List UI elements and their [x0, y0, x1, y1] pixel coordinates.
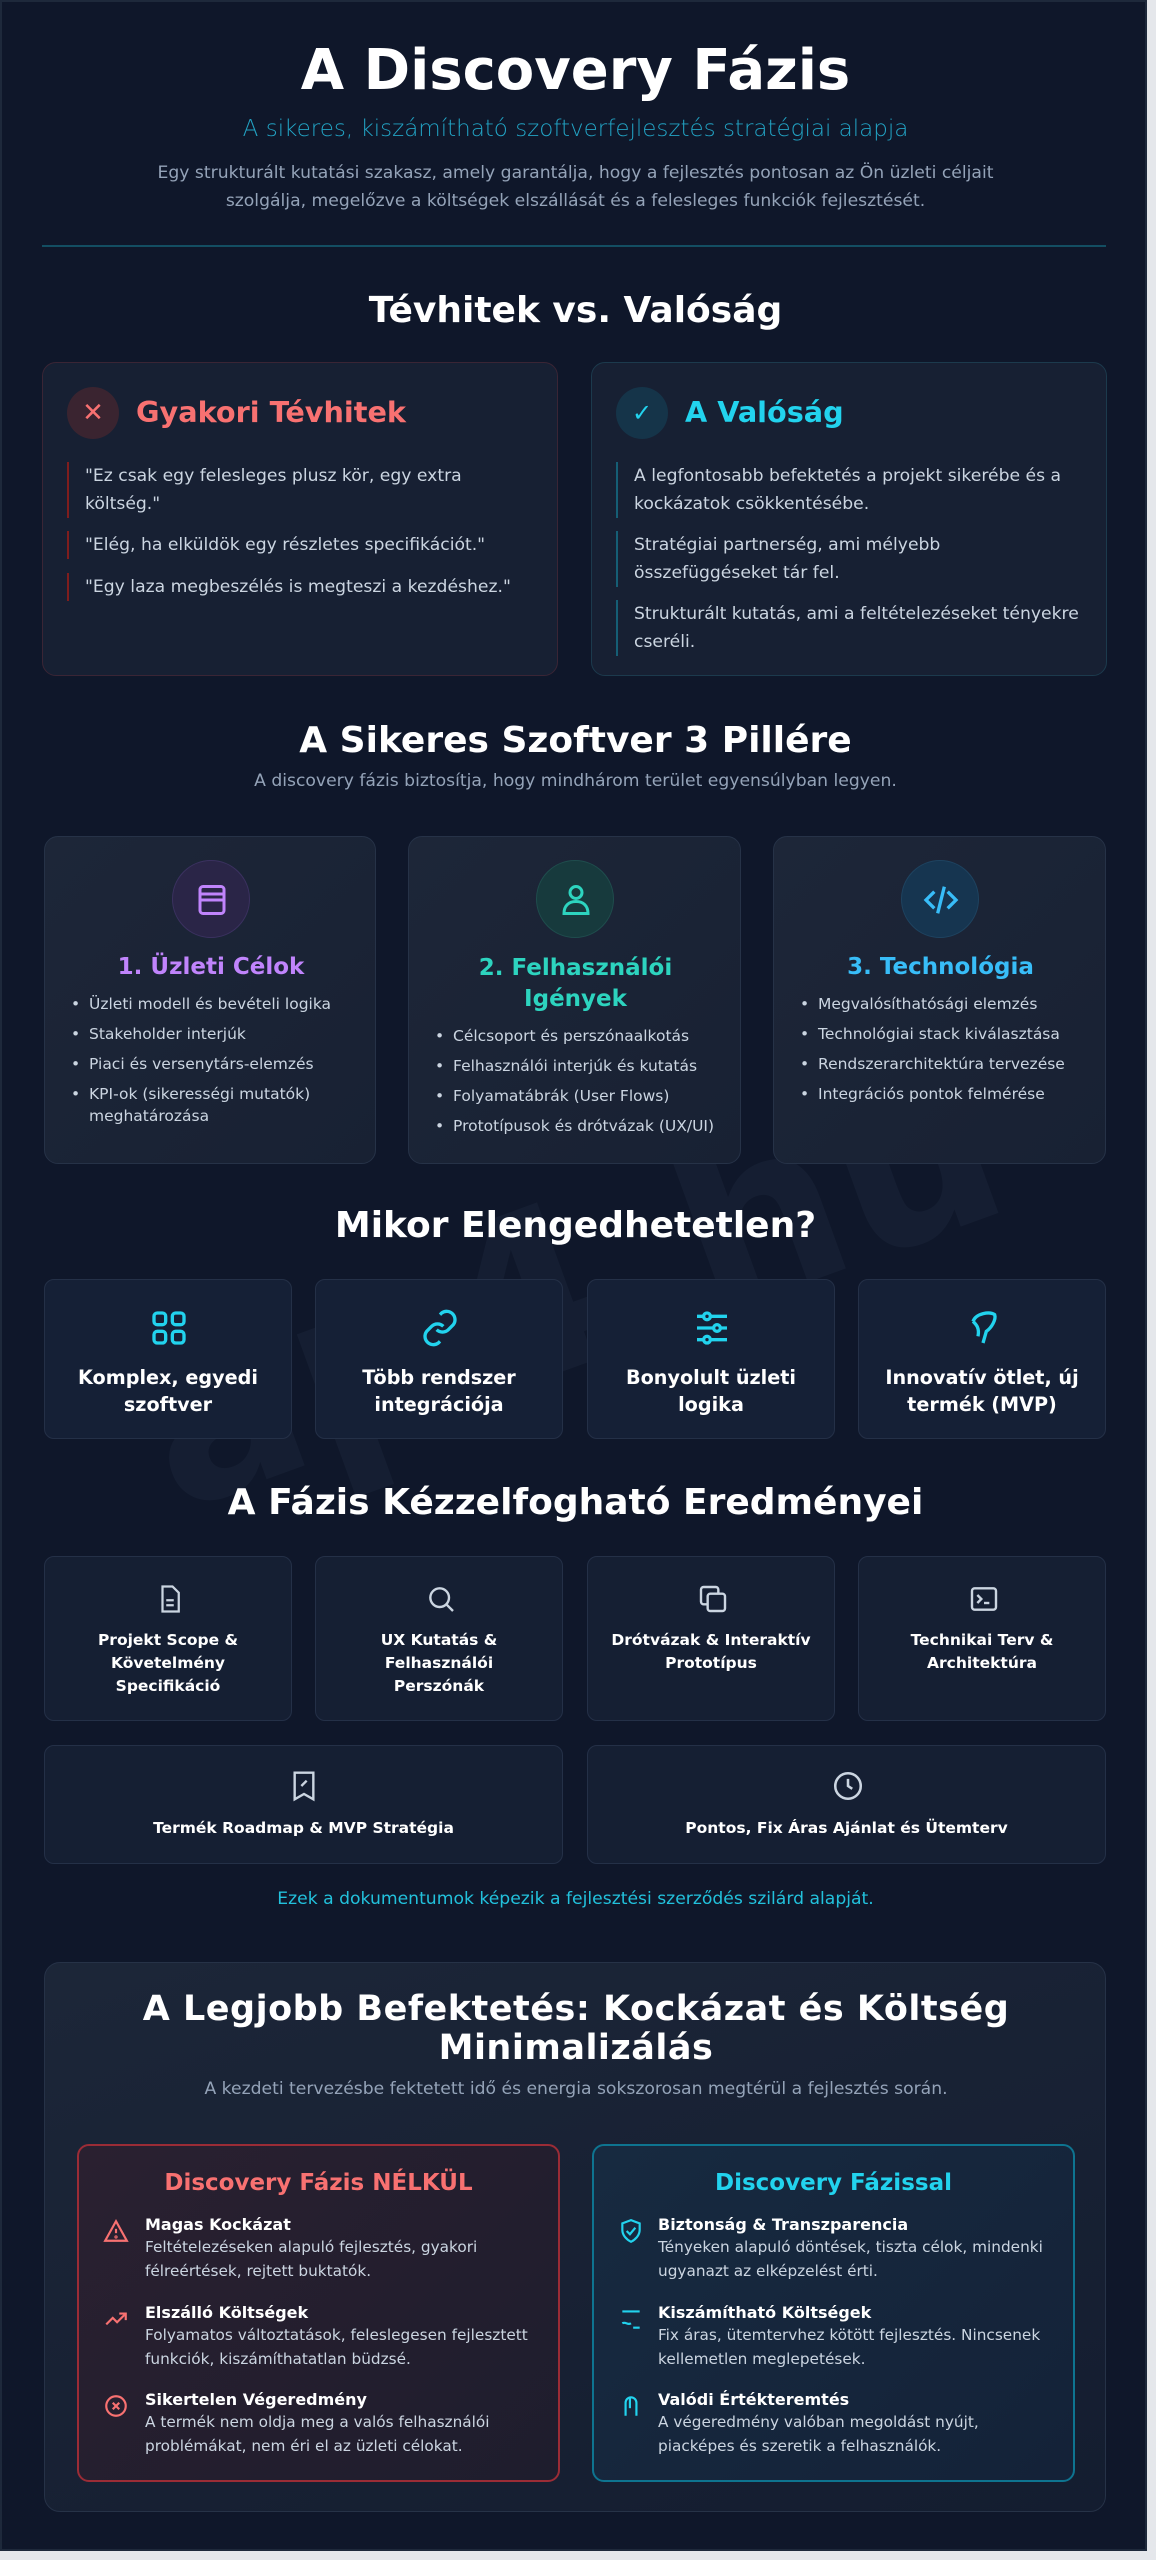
panel: reality: A legfontosabb befektetés a projekt sikerébe és a kockázatok csökkentésébe.: [634, 466, 1061, 514]
card: integration: Több rendszer: [362, 1366, 516, 1389]
pillar 2 heading: 2. Felhasználói: [479, 955, 672, 981]
panel: pillar 2: Felhasználói interjúk és kutatás: [453, 1057, 697, 1075]
icon: terminal: [970, 1587, 998, 1611]
card: innovation: termék (MVP): [907, 1393, 1057, 1416]
heading: deliverables: A Fázis Kézzelfogható Eredményei: [228, 1482, 923, 1523]
card: complex: szoftver: [124, 1393, 212, 1416]
icon: grid: [152, 1311, 186, 1345]
card: wireframes: Prototípus: [665, 1654, 757, 1672]
heading: myths: Gyakori Tévhitek: [136, 395, 406, 429]
card: scope: [44, 1556, 292, 1721]
pillars subtitle: A discovery fázis biztosítja, hogy mindhárom terület egyensúlyban legyen.: [254, 771, 897, 791]
icon: cross: ✕: [82, 398, 104, 428]
card: pricing: Pontos, Fix Áras Ajánlat és Ütemterv: [685, 1819, 1008, 1837]
panel: pillar 1: Üzleti modell és bevételi logika: [89, 995, 331, 1013]
heading: investment: [143, 1989, 1009, 2068]
heading: with: Discovery Fázissal: [715, 2170, 952, 2196]
panel: reality: Stratégiai partnerség, ami mélyebb összefüggéseket tár fel.: [634, 535, 940, 583]
heading: reality: A Valóság: [685, 395, 844, 429]
icon: idea: [972, 1311, 997, 1344]
icon: cross: [67, 387, 119, 439]
item: risk: Feltételezéseken alapuló fejlesztés, gyakori félreértések, rejtett buktatók.: [145, 2238, 477, 2280]
item: security: [658, 2215, 1043, 2280]
icon: trend: [106, 2312, 127, 2326]
panel: pillar 2: Célcsoport és perszónaalkotás: [453, 1027, 689, 1045]
card: complex: [44, 1279, 292, 1439]
panel: myths: "Ez csak egy felesleges plusz kör, egy extra költség.": [85, 466, 462, 514]
panel: pillar 1: KPI-ok (sikerességi mutatók) meghatározása: [89, 1085, 310, 1125]
heading: investment: A Legjobb Befektetés: Kockázat és Költség: [143, 1989, 1009, 2029]
panel: pillar 3: Rendszerarchitektúra tervezése: [818, 1055, 1065, 1073]
panel: pillar 3: [773, 836, 1106, 1164]
heading: myths vs reality: Tévhitek vs. Valóság: [369, 290, 782, 331]
item: risk: [145, 2215, 477, 2280]
panel: reality: [591, 362, 1107, 676]
panel: pillar 1: Stakeholder interjúk: [89, 1025, 246, 1043]
card: scope: Specifikáció: [116, 1677, 220, 1695]
icon: copy: [700, 1586, 726, 1612]
item: predictable: Kiszámítható Költségek: [658, 2303, 871, 2322]
heading: when essential: Mikor Elengedhetetlen?: [335, 1205, 816, 1246]
panel: myths: "Elég, ha elküldök egy részletes specifikációt.": [85, 535, 485, 555]
card: roadmap: Termék Roadmap & MVP Stratégia: [153, 1819, 454, 1837]
item: risk: Magas Kockázat: [145, 2215, 291, 2234]
card: tech plan: Technikai Terv &: [911, 1631, 1053, 1649]
panel: myths: "Egy laza megbeszélés is megteszi a kezdéshez.": [85, 577, 511, 597]
title: A Discovery Fázis: [301, 38, 850, 103]
item: value: Valódi Értékteremtés: [658, 2390, 849, 2409]
icon: check: [616, 387, 668, 439]
card: wireframes: [587, 1556, 835, 1721]
pillar 2 heading: Igények: [524, 986, 627, 1012]
panel: without discovery: [77, 2144, 560, 2482]
icon: warning: [103, 2219, 129, 2242]
heading: without: Discovery Fázis NÉLKÜL: [164, 2170, 473, 2196]
card: wireframes: Drótvázak & Interaktív: [611, 1631, 811, 1649]
item: failure: [145, 2390, 490, 2454]
investment subtitle: A kezdeti tervezésbe fektetett idő és energia sokszorosan megtérül a fejlesztés során.: [204, 2079, 948, 2099]
card: ux: UX Kutatás &: [381, 1631, 497, 1649]
pillar 2 heading: [479, 955, 672, 1012]
item: costs: [145, 2303, 528, 2368]
item: predictable: Fix áras, ütemtervhez kötött fejlesztés. Nincsenek kellemetlen meglepetések.: [658, 2326, 1040, 2368]
icon: shield: [621, 2219, 641, 2243]
panel: pillar 1: Piaci és versenytárs-elemzés: [89, 1055, 314, 1073]
icon: search: [429, 1587, 454, 1612]
icon: card: [172, 860, 250, 938]
panel: myths: [42, 362, 558, 676]
card: tech plan: Architektúra: [927, 1654, 1037, 1672]
panel: pillar 1: [44, 836, 376, 1164]
intro text: Egy strukturált kutatási szakasz, amely garantálja, hogy a fejlesztés pontosan az Ön üzleti céljait szolgálja, megelőzve a költségek elszállását és a felesleges funkciók fejlesztését.: [158, 163, 993, 211]
pillar 3 heading: 3. Technológia: [847, 954, 1034, 980]
panel: with discovery: [592, 2144, 1075, 2482]
panel: pillar 3: Megvalósíthatósági elemzés: [818, 995, 1037, 1013]
icon: user: [536, 860, 614, 938]
panel: pillar 3: Technológiai stack kiválasztása: [818, 1025, 1060, 1043]
item: security: Biztonság & Transzparencia: [658, 2215, 908, 2234]
panel: reality: Strukturált kutatás, ami a feltételezéseket tényekre cseréli.: [634, 604, 1079, 652]
item: value: [658, 2390, 979, 2454]
card: integration: [315, 1279, 563, 1439]
panel: pillar 2: Folyamatábrák (User Flows): [453, 1087, 669, 1105]
card: innovation: [858, 1279, 1106, 1439]
card: logic: Bonyolult üzleti: [626, 1366, 796, 1389]
card: logic: [587, 1279, 835, 1439]
card: complex: Komplex, egyedi: [78, 1366, 258, 1389]
item: costs: Folyamatos változtatások, feleslegesen fejlesztett funkciók, kiszámíthatatlan büdzsé.: [145, 2326, 528, 2368]
panel: best investment: [44, 1962, 1106, 2512]
icon: x circle: [105, 2395, 127, 2417]
pillar 1 heading: 1. Üzleti Célok: [118, 954, 304, 980]
icon: code: [901, 860, 979, 938]
card: roadmap: [44, 1745, 563, 1864]
card: scope: Projekt Scope &: [98, 1631, 238, 1649]
card: innovation: Innovatív ötlet, új: [885, 1366, 1079, 1389]
card: scope: Követelmény: [111, 1654, 225, 1672]
card: tech plan: [858, 1556, 1106, 1721]
panel: pillar 2: [408, 836, 741, 1164]
item: costs: Elszálló Költségek: [145, 2303, 308, 2322]
item: failure: Sikertelen Végeredmény: [145, 2390, 367, 2409]
item: value: A végeredmény valóban megoldást nyújt, piacképes és szeretik a felhasználók.: [658, 2413, 979, 2454]
panel: pillar 3: Integrációs pontok felmérése: [818, 1085, 1045, 1103]
item: failure: A termék nem oldja meg a valós felhasználói problémákat, nem éri el az üzleti célokat.: [145, 2413, 490, 2454]
icon: roadmap: [293, 1772, 315, 1802]
icon: link: [423, 1310, 457, 1346]
icon: doc: [161, 1585, 180, 1613]
card: ux: [315, 1556, 563, 1721]
heading: pillars: A Sikeres Szoftver 3 Pillére: [299, 720, 852, 761]
card: integration: integrációja: [374, 1393, 504, 1416]
footnote: Ezek a dokumentumok képezik a fejlesztési szerződés szilárd alapját.: [277, 1889, 874, 1909]
heading: investment: Minimalizálás: [439, 2028, 713, 2068]
card: logic: logika: [678, 1393, 744, 1416]
item: security: Tényeken alapuló döntések, tiszta célok, mindenki ugyanazt az elképzelést érti.: [658, 2238, 1043, 2280]
icon: check: ✓: [632, 399, 652, 427]
icon: cost: [622, 2310, 640, 2329]
watermark: ap4.hu: [103, 1007, 1035, 1564]
icon: sliders: [697, 1311, 727, 1345]
subtitle: A sikeres, kiszámítható szoftverfejlesztés stratégiai alapja: [243, 116, 908, 142]
icon: value: [624, 2396, 638, 2416]
panel: pillar 2: Prototípusok és drótvázak (UX/UI): [453, 1117, 714, 1135]
icon: clock: [834, 1772, 862, 1800]
card: ux: Felhasználói: [385, 1654, 493, 1672]
item: predictable: [658, 2303, 1040, 2368]
card: ux: Perszónák: [394, 1677, 484, 1695]
card: pricing: [587, 1745, 1106, 1864]
